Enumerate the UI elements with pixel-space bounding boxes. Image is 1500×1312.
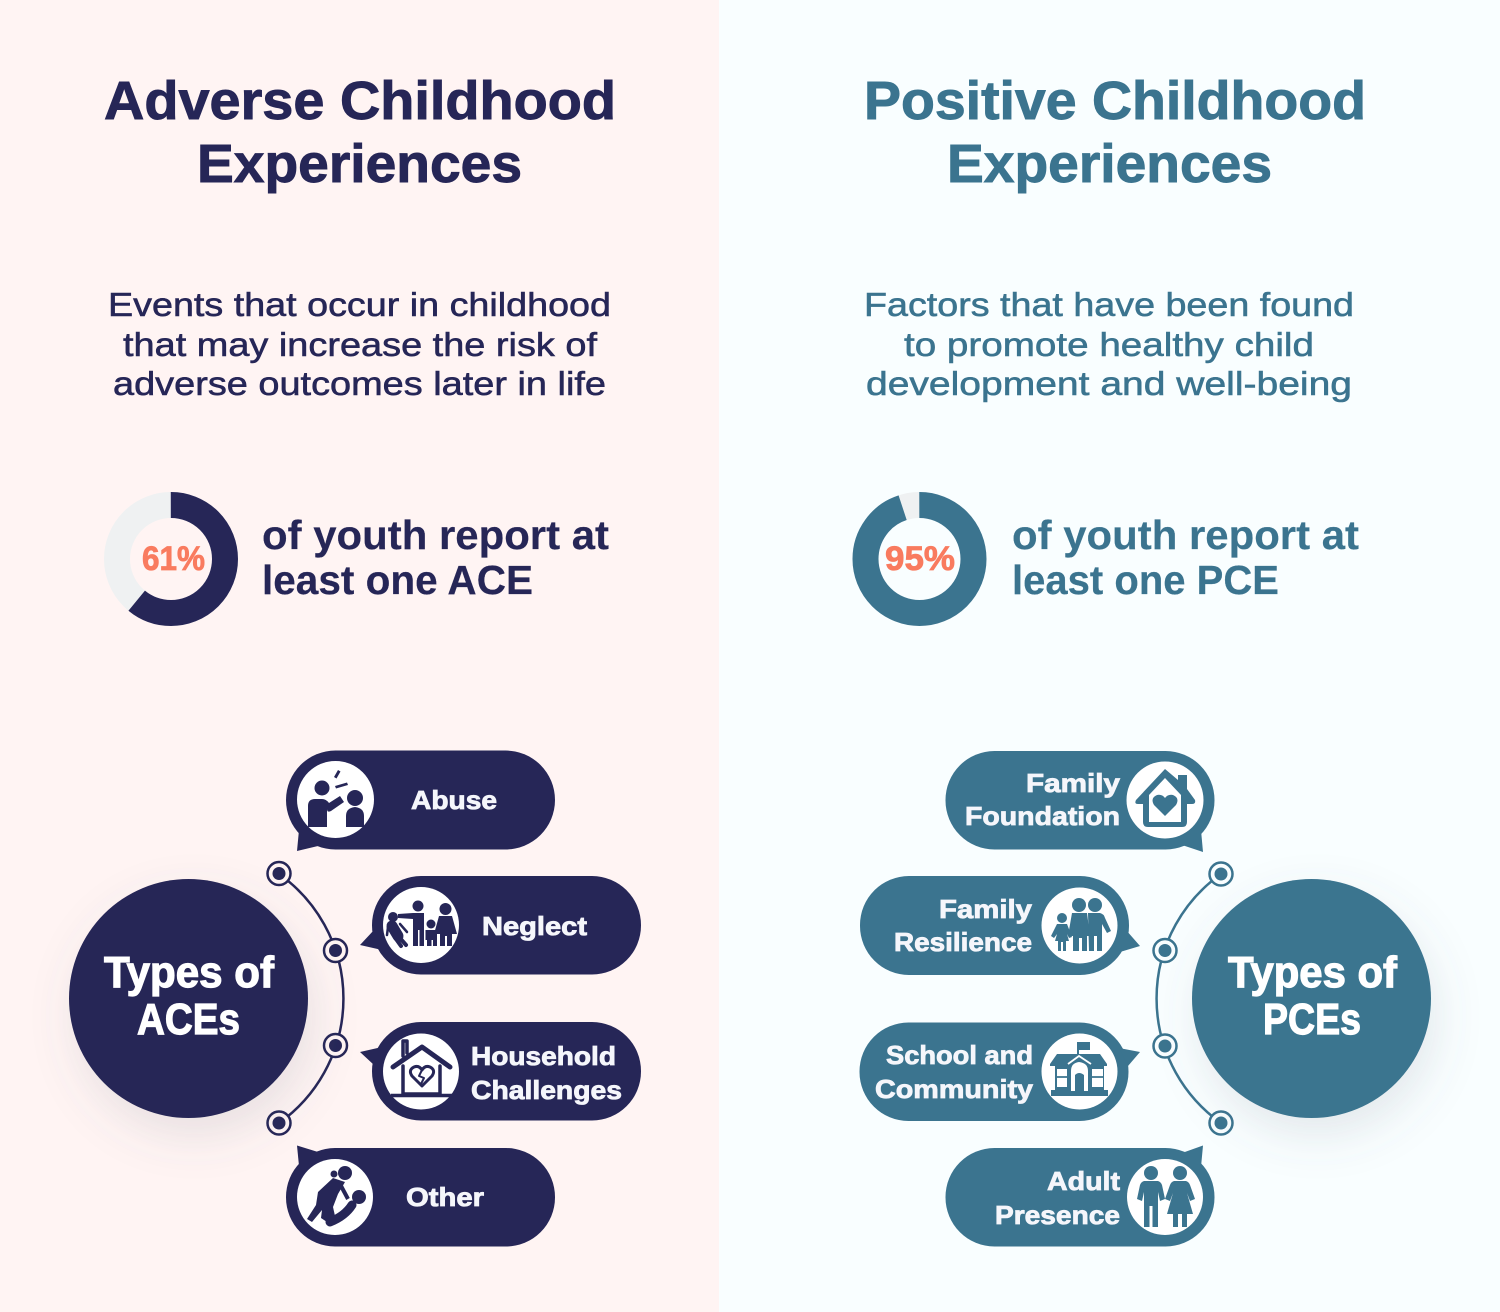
statistic text: PCE prevalence: of youth report at	[1012, 512, 1359, 558]
pill: household challenges	[360, 1022, 641, 1120]
connector arc with nodes: PCEs	[1154, 862, 1232, 1134]
pill: family foundation	[946, 751, 1214, 852]
pill: adult presence	[946, 1146, 1214, 1246]
description: PCEs definition: development and well-being	[866, 365, 1352, 402]
donut chart: 61 percent: 61%	[142, 540, 205, 578]
hub circle: types of PCEs	[1192, 879, 1431, 1118]
donut chart: 95 percent: 95%	[885, 540, 955, 578]
pill: family resilience	[860, 876, 1140, 975]
icon: house with broken heart	[391, 1041, 452, 1096]
description: PCEs definition: to promote healthy child	[904, 326, 1314, 363]
statistic text: ACE prevalence: of youth report at	[262, 512, 609, 558]
pill: neglect: Neglect	[482, 911, 587, 941]
statistic text: ACE prevalence: least one ACE	[262, 557, 533, 603]
title: positive childhood experiences	[864, 71, 1366, 194]
pill: family foundation: Family	[1026, 768, 1121, 798]
pill: household challenges: Challenges	[471, 1075, 622, 1105]
icon: adult scolding child	[308, 770, 364, 827]
hub circle: types of ACEs: ACEs	[137, 995, 240, 1044]
icon: man and woman	[1137, 1166, 1195, 1227]
hub circle: types of ACEs: Types of	[104, 948, 274, 997]
icon: adult restraining child	[307, 1166, 366, 1222]
pill: abuse: Abuse	[411, 785, 497, 815]
icon: neglected child and family	[387, 900, 457, 946]
pill: neglect	[360, 876, 641, 974]
description: ACEs definition: adverse outcomes later in life	[113, 365, 606, 402]
description: PCEs definition	[864, 286, 1354, 402]
title: positive childhood experiences: Positive Childhood	[864, 71, 1366, 131]
statistic text: PCE prevalence: least one PCE	[1012, 557, 1279, 603]
pill: family resilience: Family	[939, 894, 1033, 924]
pill: family foundation: Foundation	[965, 801, 1120, 831]
description: PCEs definition: Factors that have been found	[864, 286, 1354, 323]
pill: family resilience: Resilience	[894, 927, 1032, 957]
panel: adverse childhood experiences	[0, 0, 719, 1312]
pill: adult presence: Presence	[995, 1200, 1120, 1230]
description: ACEs definition	[108, 286, 611, 402]
icon: house with heart	[1135, 769, 1195, 827]
icon: school building	[1050, 1042, 1108, 1096]
panel: positive childhood experiences	[719, 0, 1500, 1312]
title: adverse childhood experiences: Experiences	[197, 134, 522, 194]
statistic text: ACE prevalence	[262, 512, 609, 603]
pill: other	[286, 1146, 555, 1246]
donut chart: 95 percent	[866, 505, 974, 613]
pill: school and community: School and	[886, 1040, 1033, 1070]
hub circle: types of ACEs	[69, 879, 308, 1118]
connector arc with nodes: ACEs	[268, 862, 347, 1134]
pill: school and community	[860, 1022, 1140, 1121]
description: ACEs definition: Events that occur in childhood	[108, 286, 611, 323]
hub circle: types of PCEs: PCEs	[1263, 995, 1361, 1044]
description: ACEs definition: that may increase the risk of	[123, 326, 598, 363]
statistic text: PCE prevalence	[1012, 512, 1359, 603]
title: adverse childhood experiences: Adverse Childhood	[104, 71, 616, 131]
pill: abuse	[286, 750, 555, 851]
pill: adult presence: Adult	[1047, 1166, 1120, 1196]
hub circle: types of PCEs: Types of	[1228, 948, 1397, 997]
pill: household challenges: Household	[471, 1041, 616, 1071]
title: adverse childhood experiences	[104, 71, 616, 194]
icon: family group	[1051, 898, 1111, 951]
title: positive childhood experiences: Experiences	[947, 134, 1272, 194]
pill: other: Other	[406, 1182, 484, 1212]
donut chart: 61 percent	[117, 505, 225, 613]
pill: school and community: Community	[875, 1074, 1034, 1104]
